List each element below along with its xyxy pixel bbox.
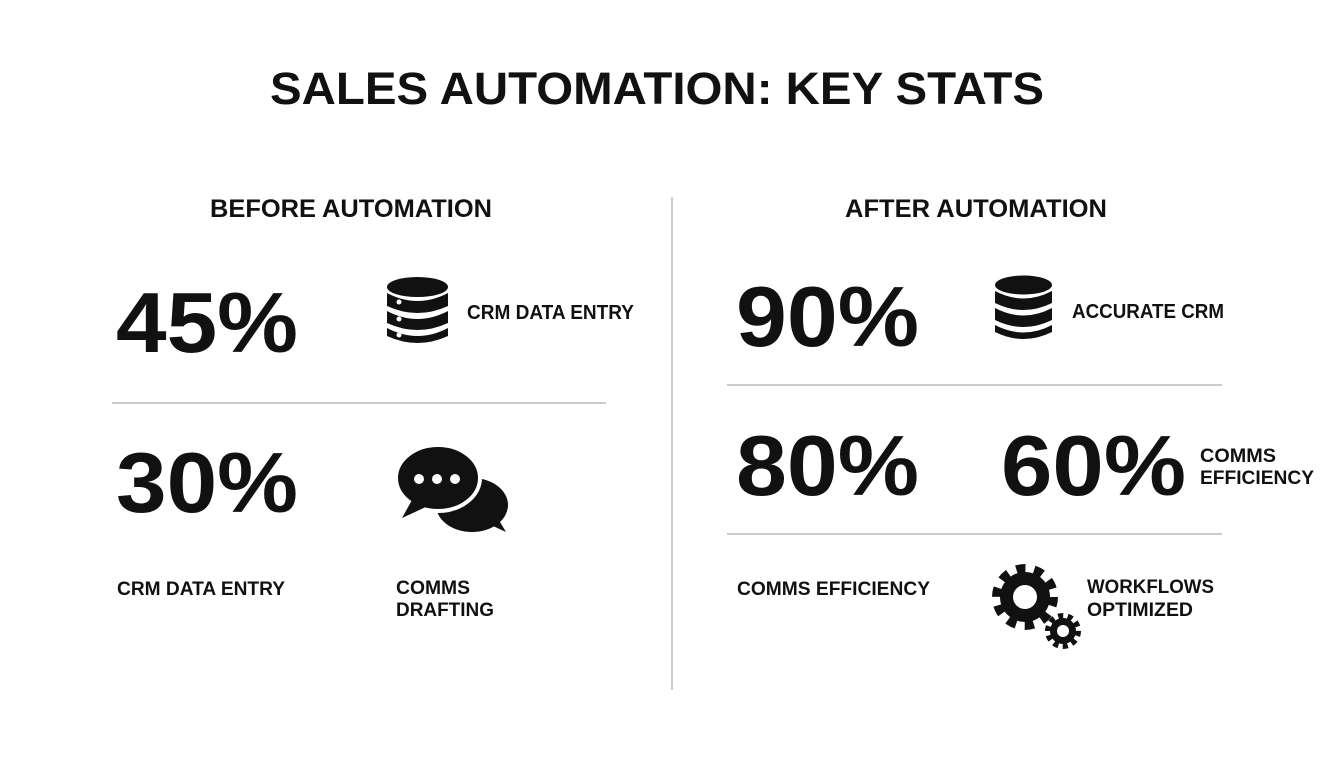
label: comms efficiency: EFFICIENCY xyxy=(1200,468,1314,489)
icon: database xyxy=(995,276,1052,339)
label: comms efficiency xyxy=(1200,446,1314,489)
stat: 90%: 90% xyxy=(736,270,919,365)
icon: gears xyxy=(997,569,1078,646)
label: comms efficiency: COMMS xyxy=(1200,446,1276,467)
label: comms drafting: COMMS xyxy=(396,578,470,599)
label: comms drafting: DRAFTING xyxy=(396,600,494,621)
heading: after automation: AFTER AUTOMATION xyxy=(845,195,1107,223)
label: workflows optimized: OPTIMIZED xyxy=(1087,600,1193,621)
stat: 60%: 60% xyxy=(1001,419,1186,514)
label: comms drafting xyxy=(396,578,494,621)
label: accurate crm: ACCURATE CRM xyxy=(1072,301,1224,323)
stat: 45%: 45% xyxy=(116,276,298,371)
heading: before automation: BEFORE AUTOMATION xyxy=(210,195,492,223)
icon: database xyxy=(387,277,448,343)
title: SALES AUTOMATION: KEY STATS xyxy=(270,63,1044,114)
icon: speech bubbles xyxy=(396,445,508,532)
panel: before automation xyxy=(112,195,635,621)
panel: after automation xyxy=(727,195,1314,646)
stat: 30%: 30% xyxy=(116,436,298,531)
label: crm data entry: CRM DATA ENTRY xyxy=(467,302,635,324)
label: workflows optimized xyxy=(1087,577,1214,621)
label: comms efficiency: COMMS EFFICIENCY xyxy=(737,579,930,600)
label: crm data entry: CRM DATA ENTRY xyxy=(117,579,285,600)
stat: 80%: 80% xyxy=(736,419,919,514)
label: workflows optimized: WORKFLOWS xyxy=(1087,577,1214,598)
